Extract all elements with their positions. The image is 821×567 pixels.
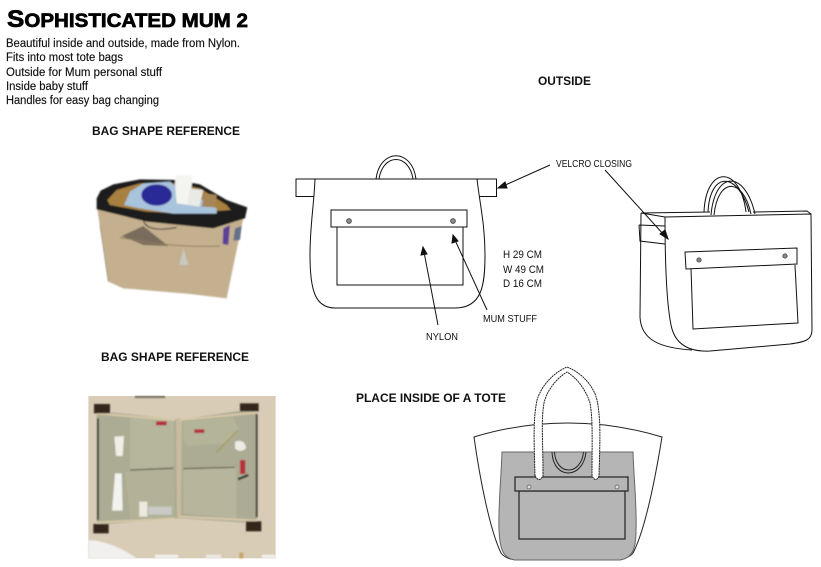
- description text block: [6, 38, 240, 107]
- tote outline: [474, 423, 662, 560]
- inner bag small handle: [552, 452, 586, 473]
- inner pocket: [519, 491, 625, 539]
- description text block: Beautiful inside and outside, made from Nylon.: [6, 38, 240, 50]
- description text block: Fits into most tote bags: [6, 52, 123, 64]
- strap: [685, 248, 797, 269]
- heading: outside: OUTSIDE: [538, 76, 591, 88]
- dimensions text: H 29 CM: [503, 249, 542, 261]
- snaps: [347, 219, 455, 223]
- arrow: velcro to side bag: [605, 170, 668, 239]
- heading: bag shape reference 2: BAG SHAPE REFERENCE: [101, 352, 249, 364]
- description text block: Outside for Mum personal stuff: [6, 67, 163, 79]
- side panel: [640, 211, 811, 350]
- front face: [665, 214, 812, 351]
- inner strap: [515, 477, 628, 491]
- tote bag drawing: [474, 367, 662, 560]
- tote handle: [534, 367, 600, 480]
- inner snaps: [527, 485, 619, 489]
- snaps: [697, 254, 787, 262]
- dimensions text: [503, 249, 544, 290]
- front bag body: [310, 179, 485, 308]
- front pocket: [337, 227, 463, 285]
- label: velcro closing: VELCRO CLOSING: [556, 159, 632, 170]
- label: mum stuff: MUM STUFF: [483, 314, 537, 325]
- icon: front bag handle: [376, 156, 416, 179]
- heading: bag shape reference 1: BAG SHAPE REFERENCE: [92, 126, 240, 138]
- description text block: Inside baby stuff: [6, 81, 89, 93]
- title: SOPHISTICATED MUM 2: [7, 6, 248, 33]
- front flap strap: [331, 210, 467, 227]
- photo: beige organiser bag: [97, 175, 247, 298]
- heading: place inside of a tote: PLACE INSIDE OF A TOTE: [356, 393, 506, 405]
- arrow: mum stuff: [452, 235, 487, 310]
- arrow: nylon: [421, 247, 438, 325]
- label: nylon: NYLON: [426, 332, 458, 343]
- velcro side tab: [639, 225, 665, 244]
- front view bag drawing: [296, 156, 496, 308]
- dimensions text: D 16 CM: [503, 278, 542, 290]
- arrow: velcro to front bag: [498, 165, 550, 188]
- description text block: Handles for easy bag changing: [6, 95, 159, 107]
- three-quarter handles: [704, 177, 755, 215]
- three-quarter view bag drawing: [639, 177, 812, 351]
- velcro tab right: [477, 179, 496, 196]
- pocket: [691, 265, 798, 329]
- photo: opened organiser interior: [88, 396, 276, 558]
- velcro tab left: [296, 179, 315, 196]
- dimensions text: W 49 CM: [503, 264, 544, 276]
- inner grey bag: [499, 452, 636, 560]
